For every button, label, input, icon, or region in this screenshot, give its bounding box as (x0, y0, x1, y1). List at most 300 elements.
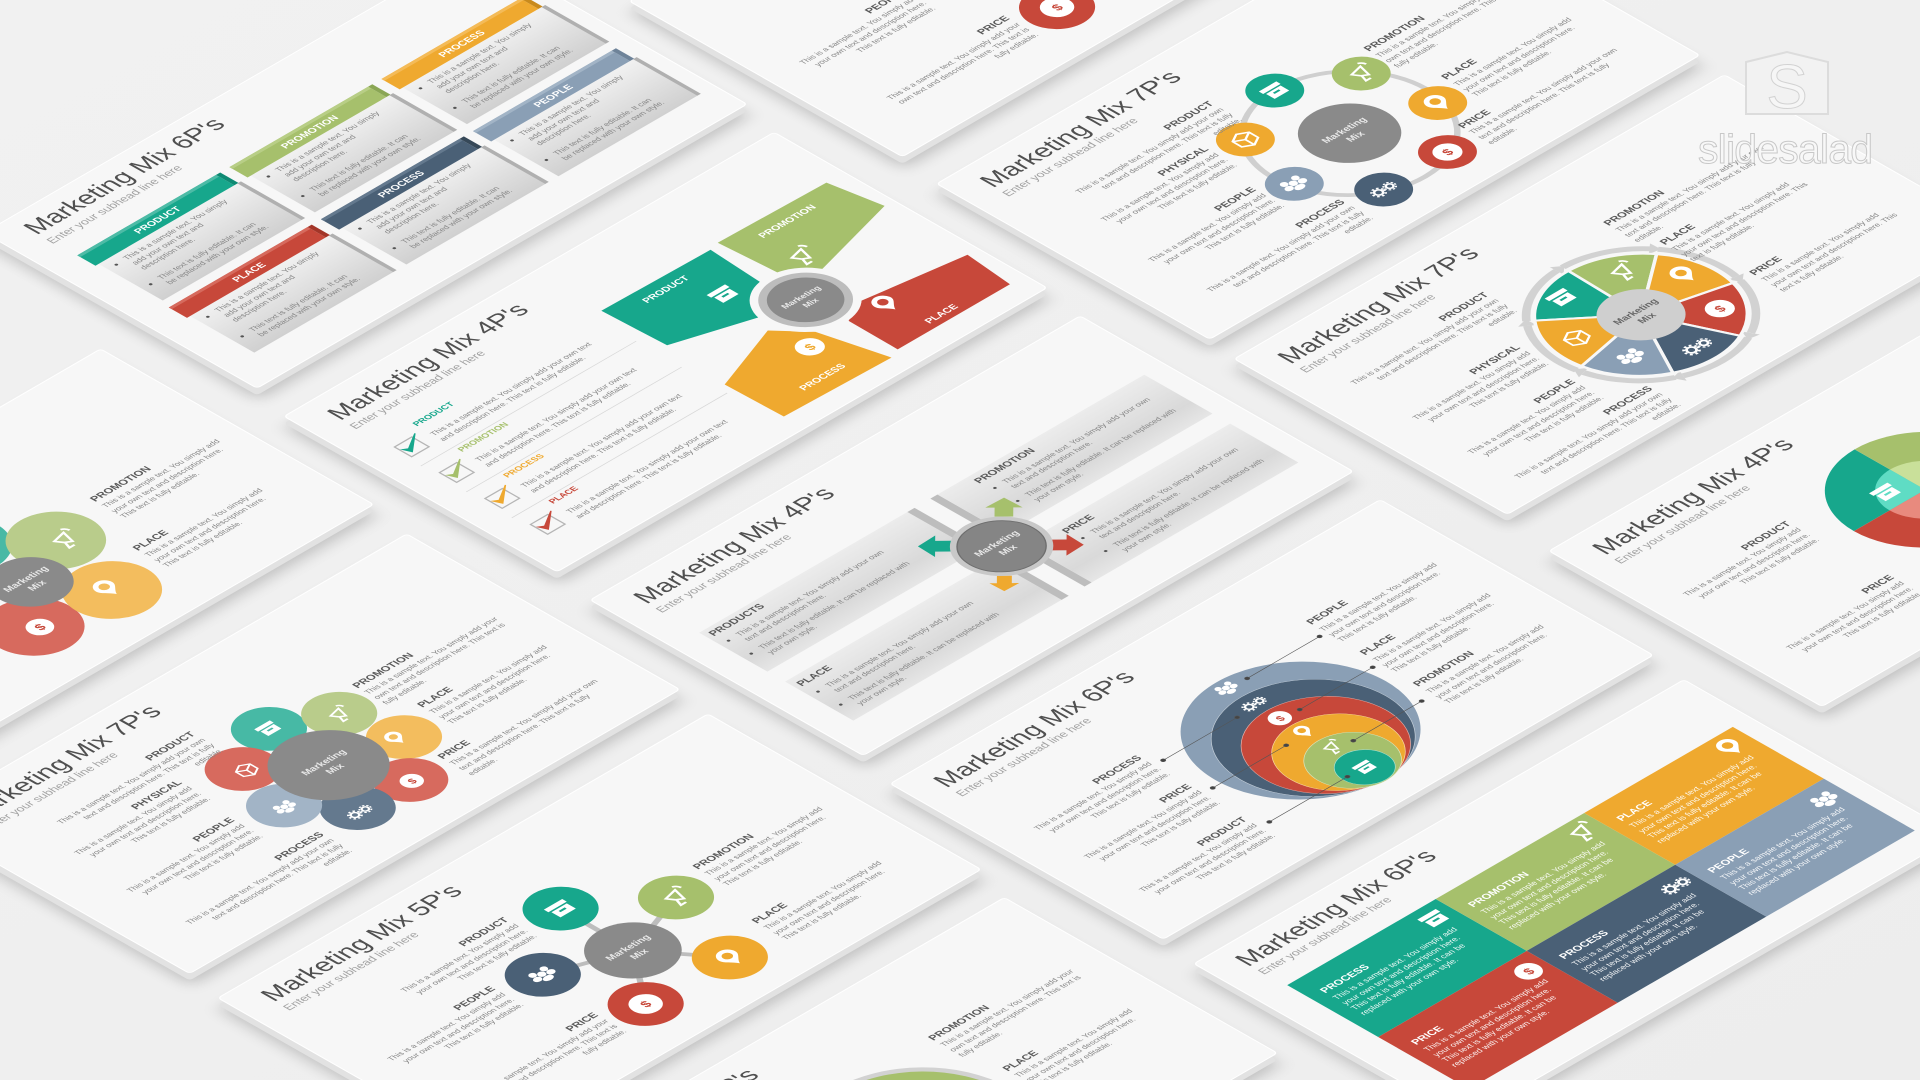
text: process (1020, 754, 1172, 842)
subtitle: Enter your subhead line here (1000, 116, 1141, 198)
card: products: This is a sample text. You simply add your own (734, 549, 886, 637)
text: process (172, 831, 354, 936)
text: people: This text is fully editable. (1203, 203, 1287, 251)
card: place: add your own text and (221, 274, 298, 318)
card: promotion: This is a sample text. You simply add your own (1000, 396, 1153, 485)
card: promotion: This is a sample text. You simply (273, 110, 382, 173)
text: people: your own text and description here. (1326, 570, 1443, 638)
card: process orange: This is a sample text. You simply (425, 22, 534, 85)
text: product: This is a sample text. You simply add (1137, 822, 1259, 893)
text: promotion: This text is fully editable. (118, 471, 202, 519)
block: place: This is a sample text. You simply add (1626, 754, 1757, 829)
subtitle: Enter your subhead line here (347, 349, 489, 431)
text: process: This is a sample text. You simply add your own (184, 837, 336, 926)
item: promotion: This is a sample text. You simply add your own text (473, 366, 640, 463)
card: people: description here. (534, 112, 593, 147)
text: price: This is a sample text. You simply add your own (448, 678, 600, 766)
text: product: your own text and description here. (414, 928, 530, 995)
text: promotion: This is a sample text. You simply add (703, 806, 825, 877)
block: place: replaced with your own style. (1654, 785, 1757, 845)
card: process orange: add your own text and (434, 45, 510, 90)
text: price: PRICE (1859, 573, 1897, 596)
text: process: text and description here. This text is fully (210, 842, 345, 921)
text: price: text and description here. This text is fully (1476, 62, 1612, 140)
card: price: This is a sample text. You simply add your own (1088, 447, 1241, 535)
title: Marketing Mix 4P's (321, 300, 535, 424)
text: people: This is a sample text. You simply add (386, 991, 508, 1062)
block: promotion: replaced with your own style. (1505, 871, 1609, 931)
item: promotion: and description here. This text is fully editable. (482, 381, 633, 468)
card: people: This text is fully editable. It can (551, 97, 654, 157)
text: physical (1399, 343, 1551, 431)
watermark: slidesalad logo: slidesalad (1698, 126, 1873, 172)
watermark: slidesalad logo: S (1766, 53, 1808, 122)
text: promotion (690, 799, 843, 887)
block: promotion: This is a sample text. You simply add (1478, 840, 1608, 915)
text: process: This is a sample text. You simply add (1032, 761, 1154, 832)
text: people: This is a sample text. You simply add (125, 823, 247, 894)
card: products: This text is fully editable. It can be replaced with (756, 560, 912, 650)
card: promotion: add your own text and (282, 134, 358, 178)
card: products: your own style. (765, 624, 819, 655)
text: place: This is a sample text. You simply add (1371, 592, 1493, 663)
text: process: your own text and description here. (1047, 766, 1163, 833)
text: price (1772, 573, 1920, 661)
card: price (1016, 424, 1298, 587)
text: place (415, 637, 568, 725)
card: product (77, 171, 305, 302)
text: price: This is a sample text. You simply add your own (1467, 47, 1620, 135)
chart: quadrant wheel (1783, 408, 1920, 571)
subtitle: Enter your subhead line here (44, 163, 186, 246)
panel: 7P flower slide (0, 534, 691, 985)
chart: flower: Mix (26, 579, 50, 593)
panel: wheel slide bottom (505, 898, 1288, 1080)
text: product: This is a sample text. You simply add your own (1074, 106, 1226, 195)
item: process: PROCESS (501, 452, 547, 479)
block: process teal: replaced with your own style. (1357, 957, 1461, 1016)
text: place: your own text and description here. This (1679, 181, 1810, 257)
panel: 5P flower slide left (0, 349, 385, 800)
text: price: text is fully editable. (1777, 253, 1846, 293)
card: place: description here. (230, 289, 289, 323)
item: process: and description here. This text is fully editable. (528, 406, 679, 494)
text: product (43, 730, 226, 836)
text: place: your own text and description here. (1461, 25, 1577, 92)
text: promotion: This is a sample text. You simply add (100, 438, 222, 509)
text: product: PRODUCT (1436, 291, 1492, 323)
text: product: text and description here. This text is fully (1375, 303, 1510, 381)
title: Marketing Mix 7P's (974, 67, 1188, 191)
text: people: This is a sample text. You simply add (1317, 562, 1439, 632)
text: product: PRODUCT (456, 916, 512, 948)
text: promotion: own text and description here. This text is (947, 974, 1083, 1053)
text: price: This is a sample text. You simply add (1784, 580, 1907, 651)
text: process: PROCESS (1090, 754, 1145, 786)
text: place (1657, 169, 1819, 263)
text: product: PRODUCT (1161, 99, 1217, 132)
block: process teal: PROCESS (1317, 963, 1373, 995)
text: process (1501, 385, 1683, 490)
text: price (1747, 200, 1909, 293)
item: promotion: PROMOTION (455, 421, 511, 453)
text: process: PROCESS (1600, 385, 1656, 417)
card: price: your own style. (1119, 521, 1174, 553)
text: place: your own text and description here. (1380, 601, 1496, 668)
card: promotion: This text is fully editable. It can (307, 133, 410, 193)
text: people: your own text and description here. (812, 0, 929, 68)
item: process (472, 382, 694, 511)
card: price: text and description here. (1097, 490, 1183, 540)
text: place: PLACE (749, 901, 791, 925)
text: price: This is a sample text. You simply add (1759, 212, 1881, 283)
item: place: This is a sample text. You simply add your own text (564, 418, 731, 515)
chart: wheel top (748, 1038, 1094, 1080)
text: promotion: PROMOTION (1361, 14, 1428, 53)
text: people (1304, 554, 1458, 643)
text: people: This text is fully editable. (1335, 594, 1419, 643)
text: process: This is a sample text. You simply add your own (1205, 205, 1357, 293)
block: promotion: This text is fully editable. It can be (1496, 856, 1616, 925)
text: promotion: This is a sample text. You simply add (1424, 624, 1546, 694)
hub: Marketing (972, 529, 1023, 558)
text: product (1062, 99, 1245, 205)
card: process navy: This is a sample text. You simply (365, 162, 473, 225)
card: promotion (930, 375, 1212, 538)
panel: 7P pie slide (1225, 75, 1920, 526)
block: process navy: replaced with your own style. (1596, 923, 1700, 983)
text: price: This text is fully editable. (1139, 800, 1222, 848)
title: Marketing Mix 4P's (628, 484, 842, 607)
card: place: be replaced with your own style. (255, 276, 363, 338)
block: promotion: your own text and description here. (1487, 849, 1611, 920)
item: promotion (426, 356, 649, 485)
text: promotion: This text is fully editable. (721, 838, 805, 887)
text: people: This is a sample text. You simply add (1466, 384, 1588, 455)
card: people: This is a sample text. You simply (517, 74, 625, 137)
text: people: your own text and description here. (1161, 197, 1278, 265)
block: promotion: PROMOTION (1465, 870, 1532, 909)
block: people: replaced with your own style. (1745, 836, 1848, 896)
chart: fan: PRODUCT (640, 275, 693, 305)
text: physical (60, 778, 213, 866)
title: Marketing Mix 4P's (1586, 435, 1800, 558)
text: product: editable. (1210, 117, 1244, 137)
text: price: PRICE (435, 739, 474, 761)
panel: 5P hub slide (209, 714, 992, 1080)
chart: fan: PROMOTION (756, 203, 819, 240)
card: process orange: be replaced with your own style. (468, 47, 575, 109)
block: people: This text is fully editable. It can be (1736, 822, 1855, 891)
text: promotion: PROMOTION (350, 651, 417, 690)
block: place: PLACE (1614, 799, 1655, 823)
chart: concentric circles: $ (1273, 714, 1289, 723)
text: product: editable. (1485, 308, 1519, 328)
text: price: This is a sample text. You simply add (1082, 789, 1204, 860)
text: product: editable. (192, 747, 226, 767)
block: promotion (1436, 813, 1675, 951)
block: place (1584, 727, 1824, 865)
text: physical: This is a sample text. You simply add (1410, 350, 1533, 421)
item: product (381, 330, 604, 459)
text: product: This is a sample text. You simply add your own (55, 737, 208, 825)
panel: 4P wheel slide right (1540, 267, 1920, 718)
text: price: fully editable. (580, 1028, 629, 1056)
block: process navy: PROCESS (1556, 929, 1612, 961)
block: people: This is a sample text. You simply add (1717, 806, 1848, 881)
chart: pie wheel (1443, 201, 1839, 429)
card: promotion: text and description here. (1009, 440, 1095, 490)
text: process: text and description here. This text is fully (1538, 397, 1674, 475)
text: people (1134, 186, 1287, 273)
text: people: PEOPLE (1531, 378, 1579, 405)
watermark: slidesalad logo (1698, 52, 1873, 172)
item: place: and description here. This text is fully editable. (573, 432, 724, 520)
card: place (785, 557, 1069, 721)
card: place: PLACE (794, 664, 836, 688)
text: promotion: editable. (1632, 224, 1666, 243)
panel: 4P centre slide (581, 316, 1364, 767)
text: place: This is a sample text. You simply add (143, 487, 265, 558)
text: price: editable. (1485, 126, 1519, 146)
card: process navy: be replaced with your own style. (408, 188, 515, 250)
card: promotion (229, 83, 457, 214)
chart: 7 petal flower: $ (405, 777, 421, 786)
title: Marketing Mix 6P's (18, 114, 232, 238)
block: process navy: This text is fully editable. It can be (1587, 908, 1707, 977)
block: price: This is a sample text. You simply add (1421, 977, 1551, 1053)
chart: 7 petal flower: Marketing (299, 748, 350, 777)
text: product (387, 916, 540, 1004)
card: place: This is a sample text. You simply (212, 250, 321, 313)
text: people: your own text and description here. (140, 828, 256, 895)
text: price (1070, 782, 1222, 870)
title: Marketing Mix 7P's (1272, 244, 1486, 367)
text: process: PROCESS (272, 831, 327, 862)
text: process: This is a sample text. You simply add your own (1512, 391, 1665, 480)
chart: 7 petal flower: Mix (324, 762, 348, 776)
text: process: editable. (320, 848, 354, 867)
text: price: your own text and description here. (1097, 794, 1213, 862)
card: product: be replaced with your own style. (164, 224, 271, 286)
text: product (1125, 815, 1278, 904)
hub (928, 504, 1075, 588)
text: place: This text is fully editable. (1389, 625, 1473, 673)
text: promotion: your own text and description here. (109, 447, 225, 514)
text: place: PLACE (130, 528, 172, 552)
chart: 7 petal flower (156, 663, 498, 860)
item: product: PRODUCT (410, 400, 457, 427)
text: price: PRICE (1747, 255, 1785, 277)
text: process: PROCESS (1293, 198, 1348, 230)
text: product: PRODUCT (1194, 815, 1251, 848)
chart: fan: Mix (800, 296, 821, 309)
text: physical: This text is fully editable. (1155, 162, 1239, 211)
item: product: and description here. This text is fully editable. (437, 355, 588, 442)
text: people (374, 985, 526, 1073)
text: price: PRICE (1157, 782, 1195, 805)
card: people: PEOPLE (532, 83, 577, 109)
text: people (113, 816, 265, 904)
text: price: text and description here. This text is fully (457, 693, 592, 772)
text: physical: PHYSICAL (1467, 343, 1524, 376)
panel: 7P ring slide (928, 0, 1711, 351)
text: place: PLACE (1439, 57, 1480, 81)
text: physical: This text is fully editable. (129, 796, 213, 844)
text: people: This text is fully editable. (442, 1002, 526, 1050)
text: promotion: PROMOTION (926, 1004, 993, 1042)
text: physical: your own text and description here. (1114, 157, 1230, 224)
panel: 6P cards slide (0, 0, 758, 400)
text: physical (1087, 145, 1240, 233)
text: place: your own text and description here. (152, 496, 268, 563)
text: place (1357, 585, 1511, 673)
text: place (749, 853, 902, 941)
text: product: This text is fully editable. (1194, 833, 1278, 881)
chart: 5P hub (904, 0, 1221, 39)
block: people: your own text and description here. (1727, 814, 1850, 886)
block: place: This text is fully editable. It can be (1645, 770, 1764, 839)
card: place: This text is fully editable. It can be replaced with (846, 611, 1002, 701)
text: place: This is a sample text. You simply add (1670, 181, 1792, 252)
card: place: PLACE (230, 261, 269, 284)
chart: flower: Marketing (1, 565, 52, 594)
text: place: your own text and description here. (771, 869, 887, 936)
text: place: PLACE (1657, 223, 1699, 247)
block: price: PRICE (1408, 1024, 1447, 1047)
card: product: This is a sample text. You simply (121, 198, 230, 261)
text: physical: your own text and description here. (1425, 355, 1542, 423)
text: product: This text is fully editable. (455, 933, 539, 982)
text: promotion: fully editable. (380, 678, 429, 706)
card: people: add your own text and (525, 98, 602, 142)
text: product: PRODUCT (1738, 520, 1795, 552)
text: promotion: text and description here. This text is fully (1622, 160, 1758, 238)
chart: ring hub: Mix (1344, 130, 1368, 144)
text: place: This text is fully editable. (445, 677, 529, 725)
text: promotion (1601, 138, 1784, 243)
text: place (1439, 9, 1592, 98)
text: place (130, 480, 283, 568)
text: price: own text and description here. This text is (896, 26, 1032, 105)
text: people: PEOPLE (1212, 186, 1259, 213)
text: product (1337, 291, 1520, 396)
text: place: This is a sample text. You simply add (427, 644, 549, 715)
title: Marketing Mix 5P's (255, 881, 469, 1005)
card: place: This is a sample text. You simply add your own (823, 600, 976, 688)
text: promotion (1411, 616, 1564, 705)
text: people (1454, 378, 1606, 466)
card: product: PRODUCT (132, 205, 184, 236)
text: promotion: PROMOTION (690, 832, 757, 871)
panel: 5P top slide cropped (620, 0, 1404, 168)
chart: pie wheel: Marketing (1611, 298, 1662, 327)
card: people: be replaced with your own style. (560, 99, 667, 161)
card: process orange: PROCESS (436, 29, 489, 59)
title: Marketing Mix 6P's (928, 667, 1142, 791)
text: place: This is a sample text. You simply add (1013, 1008, 1135, 1079)
card: place: your own style. (855, 675, 909, 706)
chart: concentric circles (1119, 628, 1480, 836)
card: products: text and description here. (742, 592, 828, 642)
chart: fan: Marketing (779, 284, 823, 310)
block: price: This text is fully editable. It can be (1439, 994, 1559, 1063)
text: process: This text is fully editable. (1089, 771, 1172, 820)
text: promotion (926, 961, 1094, 1058)
card: price: This text is fully editable. It can be replaced with (1111, 458, 1266, 548)
text: product: PRODUCT (143, 730, 199, 762)
panel: 6P grid slide (1185, 680, 1920, 1080)
block: process navy: your own text and description here. (1578, 901, 1702, 972)
text: place: PLACE (1357, 633, 1399, 657)
text: price: editable. (466, 757, 500, 777)
card: promotion: PROMOTION (279, 114, 342, 150)
text: people: your own text and description here. (400, 997, 517, 1064)
text: process: editable. (1649, 402, 1683, 422)
block: process teal: This text is fully editable. It can be (1348, 942, 1468, 1011)
text: place: PLACE (415, 685, 456, 709)
text: place: text is fully editable. (1688, 223, 1756, 263)
text: price: PRICE (1456, 108, 1494, 130)
chart: fan: $ (800, 341, 820, 352)
block: price: $ (1519, 966, 1538, 977)
text: promotion: PROMOTION (1411, 650, 1477, 688)
text: product (1669, 520, 1822, 608)
card: process navy: add your own text and (373, 186, 450, 230)
card: promotion: This text is fully editable. It can be replaced with (1023, 408, 1179, 498)
arrow: promotion (985, 497, 1023, 517)
text: physical: PHYSICAL (1155, 145, 1212, 178)
text: promotion: fully editable. (956, 1030, 1005, 1058)
chart: ring hub: $ (1438, 147, 1457, 158)
text: physical: This is a sample text. You simply add (1099, 152, 1221, 223)
text: product: This is a sample text. You simply add (1681, 527, 1803, 597)
text: promotion: your own text and description here. (1433, 632, 1549, 700)
text: process: text and description here. This text is fully (1231, 210, 1366, 289)
text: place: your own text and description here. (436, 653, 553, 720)
chart: ring hub (1162, 26, 1527, 236)
subtitle: Enter your subhead line here (953, 716, 1095, 798)
text: price: This is a sample text. You simply add your (885, 21, 1023, 101)
subtitle: Enter your subhead line here (653, 532, 795, 615)
text: price: your own text and description here. (1799, 585, 1916, 653)
text: place: PLACE (1000, 1049, 1042, 1073)
item: place (517, 408, 740, 537)
arrow: place (989, 576, 1019, 591)
text: promotion (87, 431, 240, 519)
chart: flower (0, 475, 198, 687)
text: promotion: This text is fully editable. (1442, 656, 1526, 705)
text: product: This is a sample text. You simply add (399, 923, 521, 994)
card: promotion: be replaced with your own style. (316, 135, 423, 197)
text: physical: This is a sample text. You simply add (72, 785, 194, 856)
block: process teal: your own text and description here. (1339, 935, 1463, 1006)
text: people: PEOPLE (451, 985, 499, 1012)
text: place: This text is fully editable. (161, 520, 245, 568)
chart: 5P hub: Marketing (603, 933, 654, 963)
card: process navy: This text is fully editable. It can (399, 185, 502, 245)
card: product: description here. (138, 237, 198, 271)
hub: Mix (997, 543, 1021, 557)
block: people: PEOPLE (1705, 847, 1753, 875)
card: process orange: description here. (442, 60, 502, 95)
text: price (872, 14, 1041, 111)
text: place: This is a sample text. You simply add (762, 860, 884, 931)
chart: fan (598, 176, 1020, 419)
text: place: This text is fully editable. (780, 893, 864, 941)
subtitle: Enter your subhead line here (1297, 292, 1439, 375)
text: people: This text is fully editable. (1522, 395, 1606, 443)
